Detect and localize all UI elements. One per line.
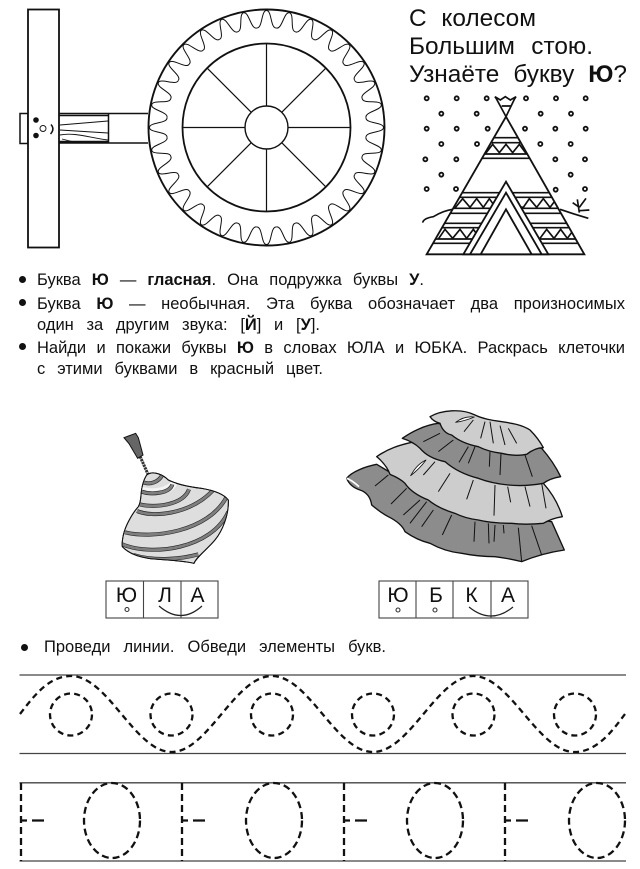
bands xyxy=(122,475,228,559)
instructions list: Буква Ю — необычная. Эта буква обозначает два произносимых xyxy=(37,295,625,313)
word ЮБКА letters: Ю xyxy=(387,584,409,606)
word ЮБКА letters xyxy=(387,584,515,606)
instructions list: с этими буквами в красный цвет. xyxy=(37,360,323,378)
fold lines xyxy=(375,420,546,562)
axle xyxy=(59,114,148,143)
riddle text: Узнаёте букву Ю? xyxy=(409,61,627,88)
body outline xyxy=(122,473,228,563)
word ЮБКА letters: А xyxy=(501,584,515,606)
bottom ruffle xyxy=(347,464,564,562)
wavy tire xyxy=(131,0,402,263)
riddle text: С колесом xyxy=(409,4,536,32)
illustration: spinning top xyxy=(122,433,228,563)
riddle text: Большим стою. xyxy=(409,32,593,60)
snow dots xyxy=(423,96,588,192)
word ЮБКА letters: Б xyxy=(429,584,443,606)
word ЮЛА letters xyxy=(116,584,204,606)
exercise prompt: Проведи линии. Обведи элементы букв. xyxy=(44,638,386,656)
instructions list: один за другим звука: [Й] и [У]. xyxy=(37,316,320,334)
third ruffle xyxy=(377,442,562,524)
tracing exercise: letter Ю elements xyxy=(20,783,626,861)
top ruffle xyxy=(430,411,543,455)
handle rod xyxy=(140,457,148,475)
illustration: teepee with dots xyxy=(420,96,593,254)
word ЮЛА letters: Ю xyxy=(116,584,137,606)
spokes xyxy=(182,44,350,212)
stripes xyxy=(434,136,578,244)
wheel xyxy=(131,0,402,263)
instructions list: Найди и покажи буквы Ю в словах ЮЛА и ЮБКА. Раскрась клеточки xyxy=(37,339,625,357)
instructions list: Буква Ю — гласная. Она подружка буквы У. xyxy=(37,270,424,288)
hub cap xyxy=(20,114,28,144)
ground and twig xyxy=(423,198,589,223)
word ЮЛА letters: А xyxy=(190,584,204,606)
word scheme box: ЮЛА xyxy=(106,581,218,618)
door xyxy=(463,182,548,254)
handle xyxy=(124,433,143,458)
plank face dots xyxy=(33,117,53,138)
word scheme box: ЮБКА xyxy=(379,581,528,618)
illustration: cart with wheel, letter Ю xyxy=(20,0,402,263)
word ЮБКА letters: К xyxy=(465,584,478,606)
crown xyxy=(495,97,516,117)
tent body xyxy=(427,117,584,254)
plank xyxy=(28,10,59,248)
riddle text xyxy=(409,4,627,88)
instructions list xyxy=(19,270,625,378)
illustration: skirt xyxy=(347,411,564,562)
tracing exercise: waves and circles xyxy=(20,675,626,754)
word ЮЛА letters: Л xyxy=(158,584,172,606)
body xyxy=(122,473,228,563)
second ruffle xyxy=(402,423,561,486)
